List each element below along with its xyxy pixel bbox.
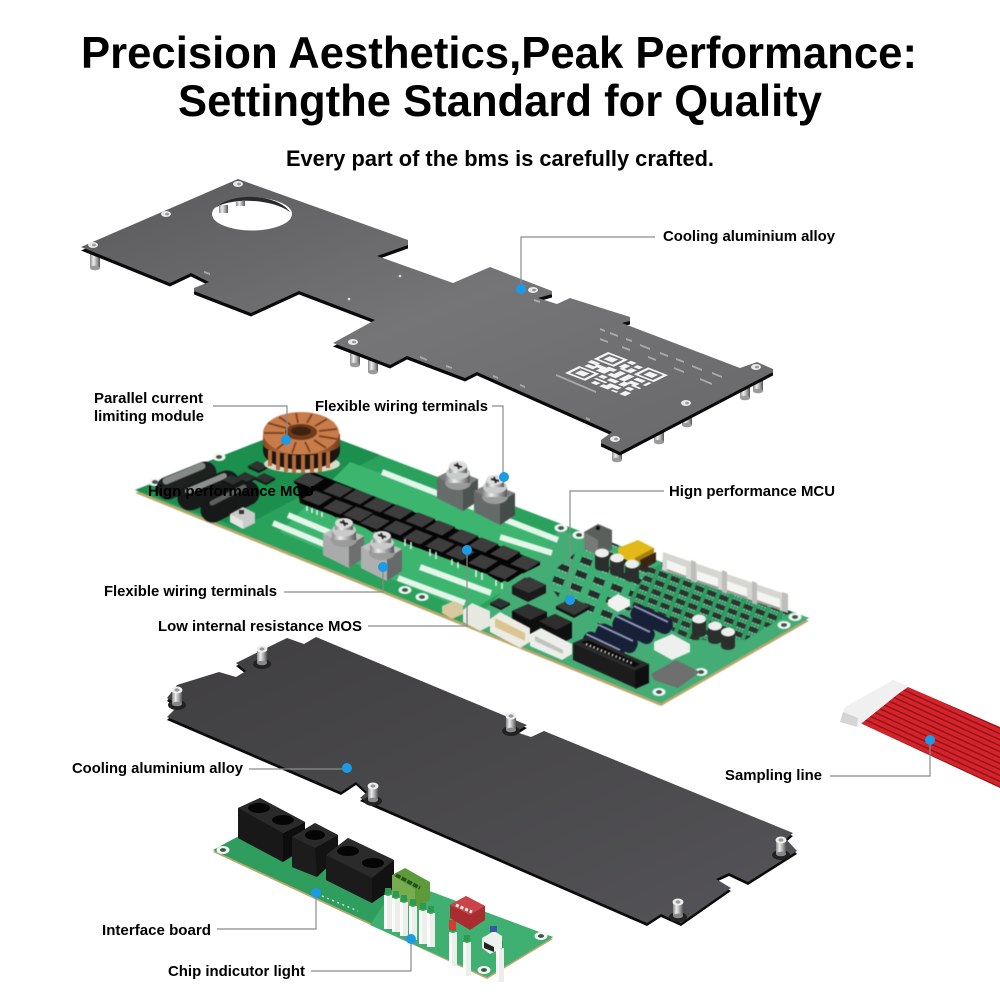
QR code — [565, 352, 668, 396]
callout: flexible wiring terminals lower: Flexible wiring terminals — [104, 583, 277, 600]
callout: cooling aluminium alloy top — [516, 228, 836, 294]
callout: low internal resistance MOS — [158, 545, 472, 635]
panel: top cooling plate — [81, 179, 773, 462]
plate silkscreen labels — [204, 271, 722, 421]
plate mounting posts — [90, 254, 763, 462]
callout: sampling line: Sampling line — [725, 767, 822, 784]
callout: parallel current limiting module — [94, 390, 291, 445]
black power ICs — [490, 577, 572, 646]
chip row — [322, 896, 358, 911]
red DIP switch — [450, 896, 485, 930]
mounting pads — [148, 453, 802, 696]
callout: overlapped high performance label: Hign performance MCU — [148, 483, 314, 500]
PCB white copper strips — [273, 472, 558, 603]
small left component — [230, 507, 255, 529]
blue capacitors — [580, 602, 675, 663]
callout: cooling aluminium alloy lower — [72, 760, 352, 777]
small driver chips — [222, 461, 275, 487]
control section ICs — [545, 536, 792, 640]
subtitle: Every part of the bms is carefully crafted. — [286, 146, 714, 171]
copper coil inductor — [263, 412, 340, 473]
callout: high performance MCU: Hign performance MCU — [669, 483, 835, 500]
yellow inductor — [618, 540, 656, 570]
title: Precision Aesthetics,Peak Performance: — [81, 29, 917, 78]
callout: interface board — [102, 888, 321, 939]
callout: cooling aluminium alloy lower: Cooling aluminium alloy — [72, 760, 244, 777]
callout: sampling line — [725, 735, 935, 784]
title — [81, 29, 917, 126]
left capacitors — [166, 466, 247, 510]
callout: chip indicator light: Chip indicutor light — [168, 963, 305, 980]
callout: flexible wiring terminals lower — [104, 562, 388, 600]
callout: flexible wiring terminals top: Flexible wiring terminals — [315, 398, 488, 415]
wiring terminals — [323, 461, 515, 581]
callout: interface board: Interface board — [102, 922, 211, 939]
MOS pins — [307, 506, 502, 589]
MOS array — [294, 471, 542, 596]
white board connectors — [442, 601, 572, 660]
cut-out circle — [212, 197, 292, 230]
panel: main BMS circuit board — [135, 412, 809, 706]
RJ45 ports — [238, 798, 394, 903]
green terminal block — [392, 868, 430, 910]
white plug — [840, 680, 908, 727]
electrolytic capacitors top — [595, 548, 735, 650]
plate standoffs — [168, 646, 790, 922]
grey chip and white shield — [651, 634, 700, 688]
white connectors row — [662, 552, 788, 613]
indicator lights — [384, 888, 504, 982]
panel: bottom cooling plate — [167, 637, 797, 926]
panel: sampling line cable — [840, 680, 1000, 788]
main MCU chip — [556, 594, 630, 618]
callout: low internal resistance MOS: Low internal resistance MOS — [158, 618, 362, 635]
callout: parallel current limiting module: limiting module — [94, 408, 204, 425]
plate holes — [88, 181, 761, 442]
callout: parallel current limiting module: Parallel current — [94, 390, 203, 407]
small terminal block — [584, 524, 612, 556]
red ribbon — [858, 687, 1000, 788]
callout: cooling aluminium alloy top: Cooling aluminium alloy — [663, 228, 836, 245]
callout: high performance MCU — [565, 483, 835, 605]
corner pads — [216, 846, 548, 974]
black IDC header — [573, 637, 649, 689]
title: Settingthe Standard for Quality — [178, 77, 822, 126]
callout: chip indicator light — [168, 934, 416, 980]
small switch — [482, 926, 502, 954]
panel: interface board — [213, 798, 553, 982]
callout: flexible wiring terminals top — [315, 398, 509, 482]
